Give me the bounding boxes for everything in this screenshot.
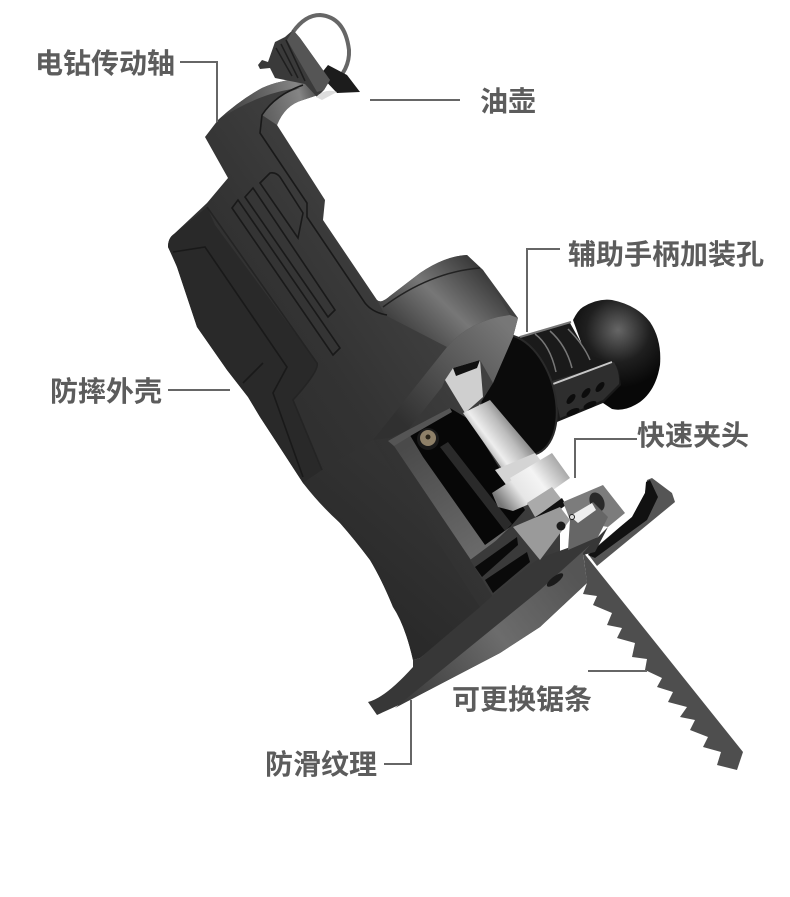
label: replaceable blade: 可更换锯条 [452,684,592,715]
housing body [168,80,560,660]
black disc behind the front [463,325,571,465]
raised panel lines [173,85,387,477]
label: auxiliary handle hole [527,239,764,332]
label: quick chuck [575,420,749,478]
label: auxiliary handle hole: 辅助手柄加装孔 [568,239,764,270]
label: anti-slip texture: 防滑纹理 [265,749,377,780]
motor housing barrel [377,255,510,347]
arm: front plate extension [588,478,675,566]
highlight on top bend [218,80,318,125]
spindle and quick chuck [445,360,570,524]
label: oil pot: 油壶 [480,86,536,117]
product: reciprocating saw attachment [168,15,743,770]
label: drive shaft [35,48,217,122]
blade [583,552,743,770]
label: drive shaft: 电钻传动轴 [35,48,175,79]
dark side shell panel [168,207,322,483]
front opening [388,408,525,563]
icon: oil pot cap with ring [258,15,360,100]
lower body face [303,440,480,660]
label: anti-slip texture [265,700,411,780]
label: quick chuck: 快速夹头 [637,420,749,451]
front collar [373,315,518,440]
label: drop resistant shell: 防摔外壳 [50,376,162,407]
clamp bracket [513,485,625,560]
icon: auxiliary handle [518,300,660,422]
rails at the base of the opening [470,528,540,597]
base plate [368,527,608,715]
